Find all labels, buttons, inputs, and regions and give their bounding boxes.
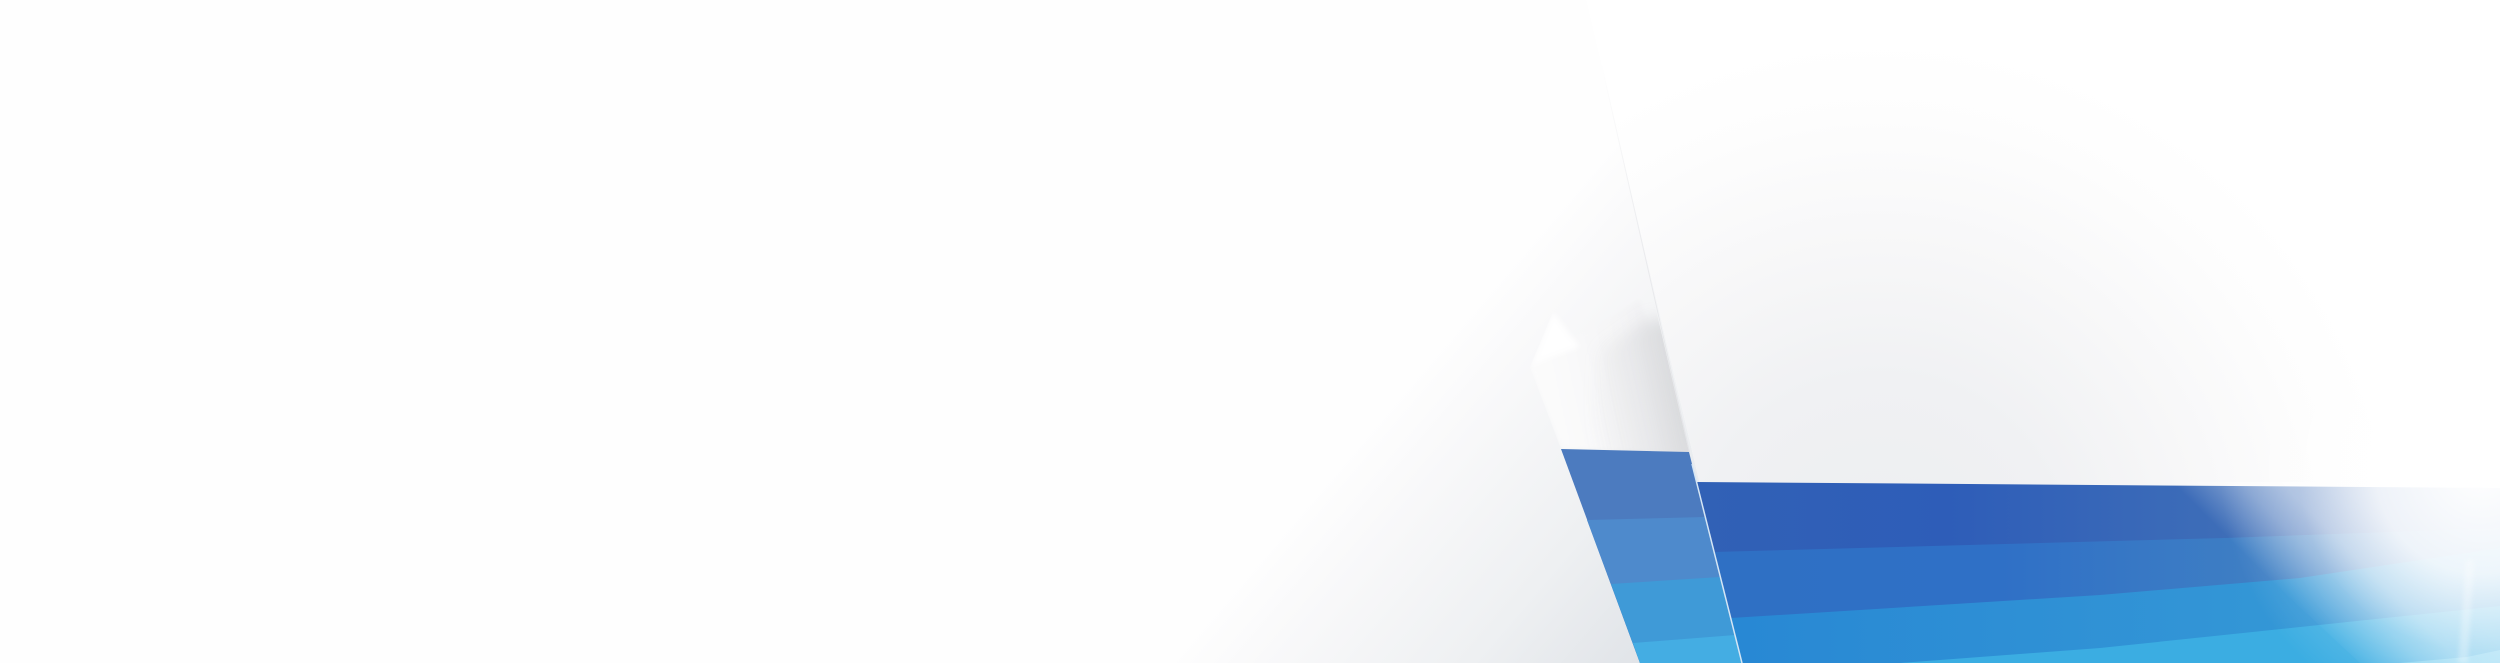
strip highlight [1530, 312, 1580, 367]
right folded paper panel [1586, 0, 2500, 663]
white fade over band ends [2165, 400, 2500, 663]
left shadow on paper [0, 0, 1742, 663]
fold line highlight [1600, 60, 1742, 663]
folded strip colour bands [1561, 449, 1742, 663]
folded strip, light upper section [1564, 316, 1689, 452]
banner artwork [1300, 137, 2500, 663]
main colour bands [1697, 482, 2500, 663]
